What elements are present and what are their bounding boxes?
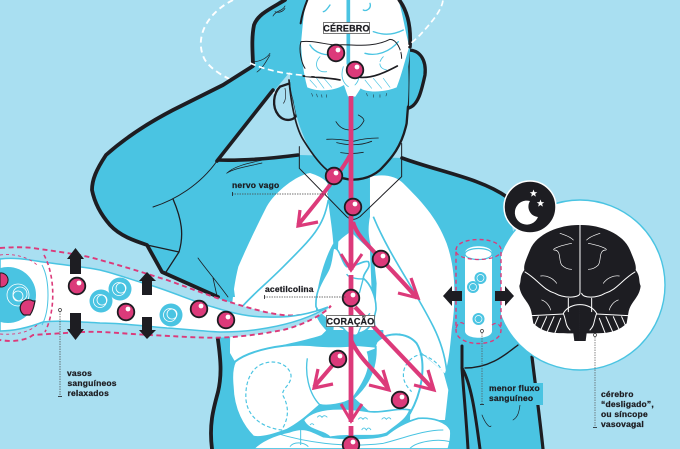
heart [316,248,376,335]
stomach [353,334,422,413]
halo: inner dashed line [250,0,443,76]
trunk [349,96,353,270]
pancreas [303,409,410,437]
label: vasos sanguíneos relaxados: relaxados [68,388,109,398]
moon badge [504,181,556,233]
dashed original width [456,240,501,344]
blood pressure dots [69,45,408,449]
abdomen organs [232,330,451,449]
white circle [495,200,665,370]
arm outline [92,0,285,297]
label: cérebro desligado: “desligado”, [601,399,654,409]
label: CORAÇÃO: CORAÇÃO [327,316,374,326]
right upper branch [353,222,417,298]
dilation arrows [67,248,156,340]
label: acetilcolina: acetilcolina [265,284,314,294]
vessel cylinder [465,246,492,338]
left lower branch [314,359,338,387]
brain on head [301,0,409,97]
right flank white [410,347,448,420]
head [227,0,425,219]
reduced flow vessel [456,240,501,344]
torso [211,155,542,449]
label: vasos sanguíneos relaxados: sanguíneos [68,378,117,388]
blood cells [90,278,182,326]
vagus nerve arrows [298,96,434,438]
left upper branch [298,155,350,225]
leader lines [60,194,346,396]
label: menor fluxo sanguíneo: menor fluxo [489,383,540,393]
leader over vessel [480,330,484,404]
central right branches [351,340,388,388]
blue band above liver [310,330,383,350]
liver [232,345,376,437]
label: menor fluxo sanguíneo: sanguíneo [489,393,533,403]
label: nervo vago: nervo vago [232,180,279,190]
face [290,0,410,179]
mediastinum [333,232,373,333]
left ear [274,83,297,120]
arm and hand [92,0,320,297]
sleeping brain panel [495,181,665,370]
left lung [230,173,333,362]
lung lines [239,200,328,310]
constriction arrows [443,286,514,306]
right ear [407,50,425,108]
fainted brain [519,223,641,341]
organs [230,173,454,373]
label: vasos sanguíneos relaxados: vasos [67,368,92,378]
blood vessel [0,247,331,341]
vessel body [0,258,328,332]
label: CÉREBRO: CÉREBRO [323,24,370,34]
right lung [369,175,454,373]
label: menor fluxo sanguíneo [487,383,543,405]
brain folds [310,0,403,88]
halo: outer dashed ellipse [201,0,345,97]
leader over brain [594,334,596,427]
head outline [227,0,410,219]
cells [467,281,479,293]
arrowheads on trunk [341,254,362,421]
liver dashed lobe [246,362,291,430]
intestines [253,418,451,449]
vessel end cross-section [0,267,36,323]
torso outlines [211,155,543,449]
label: cérebro desligado: vasovagal [601,419,644,429]
gall and liver lobe [307,358,320,405]
vessel dilated outline [0,247,331,341]
label: cérebro desligado: ou síncope [601,409,648,419]
label: cérebro desligado: cérebro [601,389,634,399]
stomach dashed lobe [403,355,442,392]
